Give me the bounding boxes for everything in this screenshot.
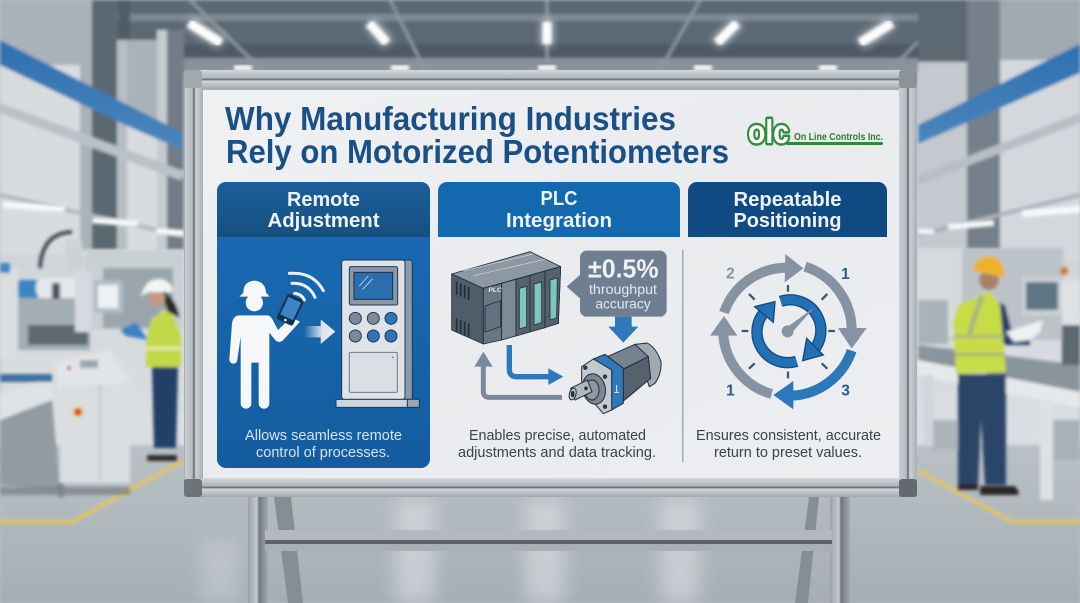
wall lights <box>3 202 1080 236</box>
callout: throughput accuracy: throughput <box>589 281 657 297</box>
illustration: PLC, motor, callout: PLC <box>488 287 502 294</box>
arrow: phone to cabinet <box>304 319 335 344</box>
outer arrow: bottom right <box>773 351 852 409</box>
icon: control cabinet <box>336 260 419 407</box>
icon: worker with phone and control cabinet <box>229 260 419 409</box>
control screen <box>1022 267 1080 365</box>
logo: On Line Controls Inc.: On Line Controls Inc. <box>794 131 883 143</box>
man worker <box>953 256 1043 495</box>
heading: repeatable positioning <box>688 182 887 237</box>
floor reflections <box>200 500 700 603</box>
panel: PLC integration <box>438 182 680 461</box>
whiteboard frame <box>184 70 917 497</box>
heading: remote adjustment: Adjustment <box>268 210 380 232</box>
outer arrow: top right <box>805 267 867 349</box>
title <box>225 100 729 170</box>
background machine <box>85 250 183 330</box>
arrow: motor to PLC <box>474 352 562 397</box>
callout: throughput accuracy: ±0.5% <box>588 253 659 283</box>
heading: PLC integration <box>438 182 680 237</box>
arrow: callout to motor <box>608 317 638 343</box>
grey machine backdrop <box>918 248 1063 340</box>
gauge ticks <box>742 285 835 378</box>
illustration: PLC, motor, callout <box>452 251 667 414</box>
icon: phone <box>276 293 304 326</box>
caption: PLC integration: adjustments and data tracking. <box>458 444 656 461</box>
icon: servo motor <box>568 343 661 414</box>
heading: remote adjustment <box>217 182 430 237</box>
stand crossbar <box>265 530 832 551</box>
chart: positioning cycle gauge <box>710 254 867 409</box>
board surface <box>203 90 899 478</box>
logo: On Line Controls Inc. <box>748 113 883 150</box>
right blue beam <box>918 44 1080 144</box>
conveyor <box>918 345 1080 500</box>
icon: worker <box>229 281 300 409</box>
panel: remote adjustment <box>217 182 430 468</box>
caption: remote adjustment: Allows seamless remote <box>245 427 402 444</box>
caption: remote adjustment: control of processes. <box>256 444 390 461</box>
robot arm <box>0 232 91 358</box>
logo: On Line Controls Inc.: olc <box>748 113 789 150</box>
woman worker <box>120 279 181 461</box>
step numbers: 1 <box>726 382 735 399</box>
heading: repeatable positioning: Repeatable <box>734 189 842 211</box>
step numbers <box>726 266 850 399</box>
heading: PLC integration: PLC <box>540 188 578 210</box>
right wall structure <box>918 0 1080 260</box>
left blue beam <box>0 40 183 150</box>
heading: remote adjustment: Remote <box>287 189 360 211</box>
title: Why Manufacturing Industries <box>225 100 676 137</box>
step numbers: 3 <box>841 382 850 399</box>
machine cabinet <box>0 350 130 497</box>
caption: repeatable positioning: Ensures consistent, accurate <box>696 427 881 444</box>
column divider <box>682 250 684 462</box>
operator screen <box>94 280 123 313</box>
yellow floor lines <box>0 460 1080 522</box>
icon: wifi arcs <box>289 273 323 300</box>
caption: PLC integration <box>458 427 656 461</box>
step numbers: 1 <box>841 266 850 283</box>
step numbers: 2 <box>726 266 735 283</box>
caption: PLC integration: Enables precise, automated <box>469 427 646 444</box>
caption: remote adjustment <box>245 427 402 461</box>
ceiling lights <box>189 20 892 71</box>
panel: repeatable positioning <box>688 182 887 461</box>
arrow: PLC to motor <box>509 345 563 385</box>
callout: throughput accuracy: accuracy <box>595 295 651 311</box>
outer arrow: bottom left <box>710 316 772 394</box>
ceiling <box>115 0 975 72</box>
title: Rely on Motorized Potentiometers <box>226 133 729 170</box>
heading: PLC integration: Integration <box>506 210 612 232</box>
outer arrow: top left <box>724 254 803 313</box>
callout: throughput accuracy <box>567 251 667 317</box>
caption: repeatable positioning <box>696 427 881 461</box>
caption: repeatable positioning: return to preset values. <box>714 444 862 461</box>
left wall structure <box>0 0 184 255</box>
gauge needle <box>782 307 814 337</box>
right scene: conveyor and worker <box>918 248 1080 500</box>
stand <box>248 497 850 603</box>
left scene: machine and worker <box>0 232 183 497</box>
heading: repeatable positioning: Positioning <box>734 210 842 232</box>
inner arrows <box>755 300 823 363</box>
floor <box>0 445 1080 603</box>
icon: PLC rack <box>452 252 561 344</box>
